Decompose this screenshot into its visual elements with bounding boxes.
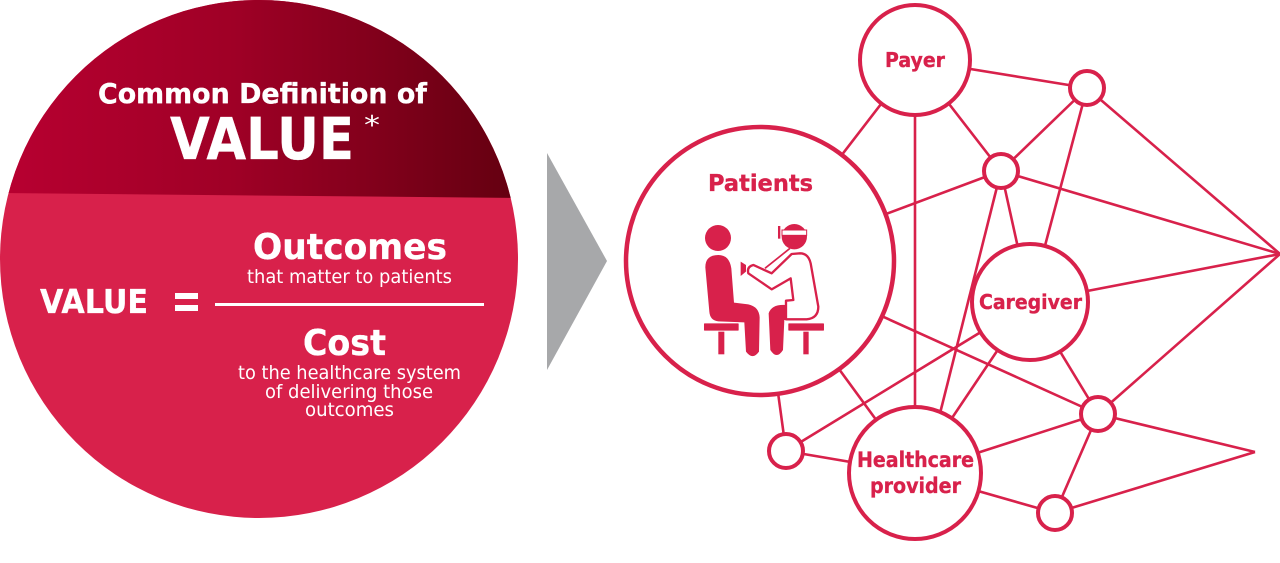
numerator: outcomes: that matter to patients (247, 266, 452, 288)
node: healthcare provider (849, 407, 981, 539)
heading: common definition of value (98, 77, 428, 173)
heading: common definition of value: Common Definition of (98, 77, 428, 110)
circle body (0, 0, 518, 518)
denominator: cost: of delivering those (265, 381, 433, 403)
node: patients (626, 127, 894, 395)
denominator: cost: Cost (303, 323, 386, 364)
node: caregiver: Caregiver (979, 290, 1082, 314)
numerator: outcomes (247, 227, 452, 288)
circle top segment (0, 0, 520, 198)
node: healthcare provider: Healthcare (857, 448, 974, 472)
icon: patient and doctor (704, 224, 824, 356)
node: small bottom (1038, 496, 1072, 530)
node: payer: Payer (885, 48, 945, 72)
arrow (547, 153, 607, 370)
equation label: value: VALUE (40, 282, 148, 321)
node: small top right (1070, 71, 1104, 105)
fraction bar (215, 303, 484, 306)
heading: common definition of value: * (364, 111, 380, 141)
denominator: cost: outcomes (305, 399, 394, 421)
denominator: cost (238, 323, 461, 421)
node: small left (769, 434, 803, 468)
panel: value definition circle (0, 0, 520, 518)
network connecting lines (760, 60, 1280, 513)
node: healthcare provider: provider (870, 474, 962, 498)
node: patients: Patients (708, 171, 813, 197)
node: payer (860, 5, 970, 115)
denominator: cost: to the healthcare system (238, 362, 461, 384)
node: small centre (984, 154, 1018, 188)
equals sign (175, 293, 198, 311)
heading: common definition of value: VALUE (170, 105, 354, 173)
node: small right (1081, 397, 1115, 431)
numerator: outcomes: Outcomes (253, 227, 447, 268)
network diagram (626, 5, 1280, 539)
node: caregiver (972, 244, 1088, 360)
